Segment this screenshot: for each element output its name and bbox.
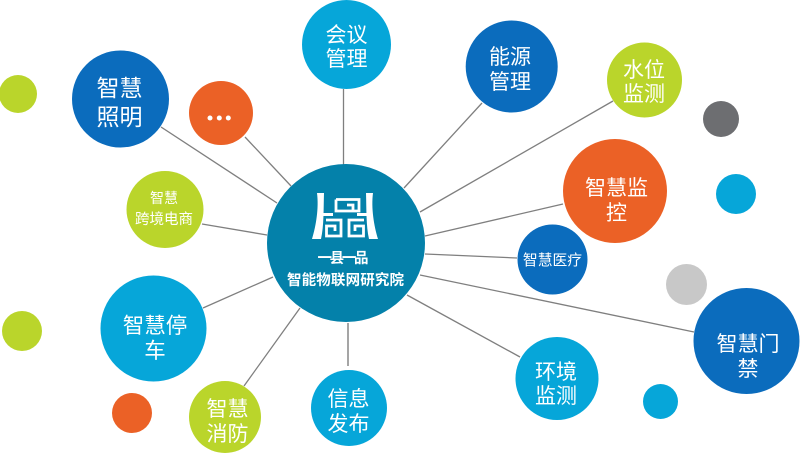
node: 水位监测: [607, 42, 682, 118]
node: 能源管理: 能源: [489, 46, 531, 69]
node: 智慧医疗: 智慧医疗: [523, 251, 582, 269]
node: 信息发布: 发布: [328, 413, 370, 436]
node: 智慧跨境电商: 跨境电商: [135, 210, 193, 228]
node: 智慧停车: [100, 276, 206, 382]
node: 会议管理: 管理: [326, 48, 368, 71]
node: 智慧停车: 智慧停: [123, 314, 187, 338]
node: 智慧消防: 智慧: [206, 398, 248, 421]
node: 环境监测: [516, 337, 598, 420]
node: 智慧医疗: [518, 224, 588, 294]
node: more (orange dots): [189, 81, 253, 145]
node: 会议管理: [302, 0, 391, 89]
node: 智慧门禁: [694, 288, 800, 394]
decorative dot: green left: [2, 311, 42, 351]
logo caption: 一县一品: [318, 251, 368, 267]
node: 信息发布: 信息: [328, 388, 370, 411]
node: 环境监测: 监测: [535, 385, 577, 408]
node: 水位监测: 水位: [623, 59, 665, 82]
decorative dot: blue bottom right: [643, 384, 678, 419]
node: 智慧消防: [189, 381, 261, 453]
node: 能源管理: 管理: [489, 71, 531, 94]
node: 智慧停车: 车: [144, 339, 166, 363]
node: 智慧照明: 智慧: [96, 75, 142, 101]
node: 智慧监控: 智慧监: [585, 177, 648, 200]
node: 水位监测: 监测: [623, 83, 665, 106]
center hub: [267, 164, 425, 322]
node: 会议管理: 会议: [326, 24, 368, 47]
node: 环境监测: 环境: [535, 361, 577, 384]
node: 智慧门禁: 智慧门: [716, 333, 780, 356]
hub title: 智能物联网研究院: [287, 271, 404, 289]
decorative dot: light gray: [666, 264, 707, 305]
decorative dot: gray: [703, 101, 739, 137]
node: 智慧监控: [563, 139, 667, 243]
logo mark: [312, 193, 378, 239]
node: 智慧照明: [72, 50, 169, 148]
node: 智慧门禁: 禁: [738, 358, 758, 381]
node: 智慧监控: 控: [606, 202, 627, 225]
decorative dot: green top left: [0, 75, 37, 113]
decorative dot: orange bottom left: [112, 393, 152, 433]
node: 智慧消防: 消防: [206, 423, 248, 446]
decorative dot: blue: [716, 174, 756, 214]
node: 智慧照明: 照明: [96, 104, 142, 130]
node: 智慧跨境电商: 智慧: [150, 190, 178, 206]
node: 信息发布: [311, 370, 387, 446]
node: 能源管理: [466, 20, 558, 112]
node: 智慧跨境电商: [126, 171, 204, 248]
